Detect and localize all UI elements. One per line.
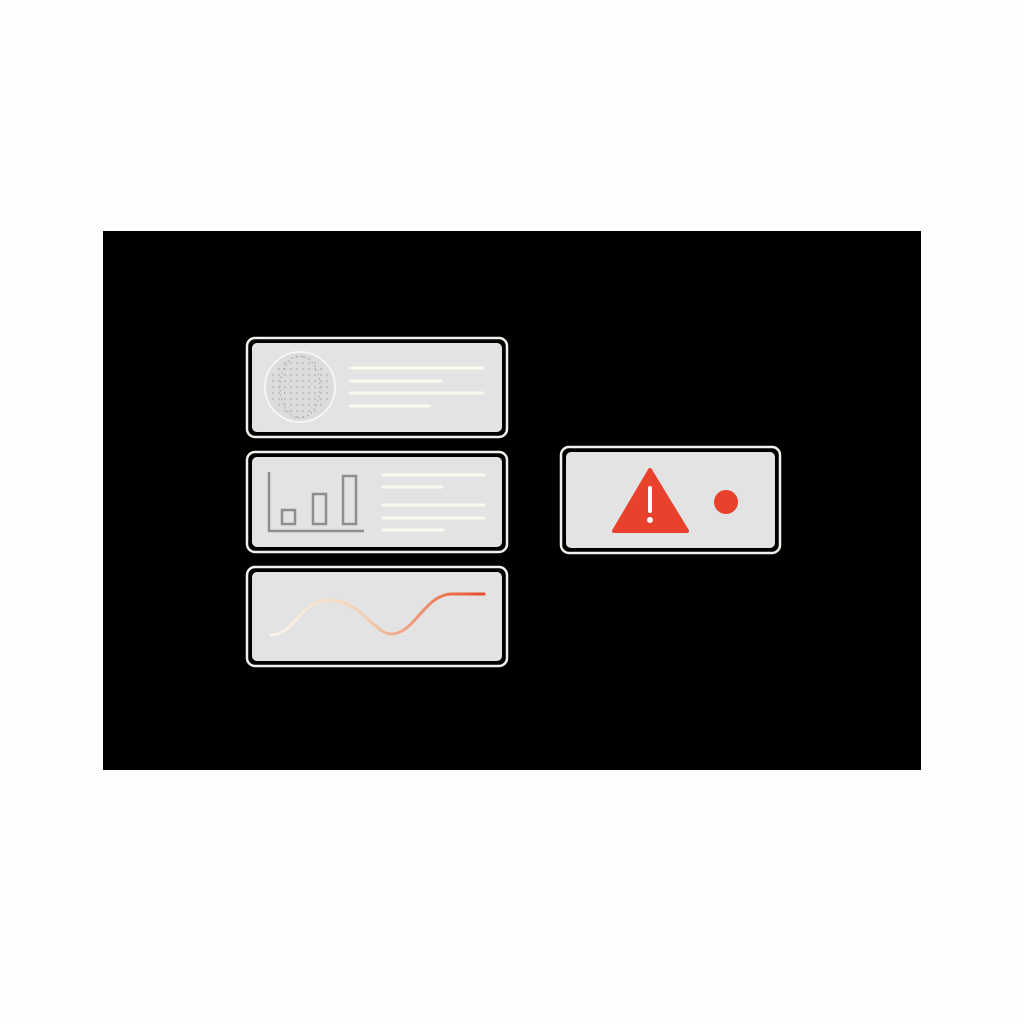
wave chart	[271, 594, 484, 635]
status dot	[714, 490, 738, 514]
icon: warning triangle	[614, 470, 687, 531]
dark screen panel	[103, 231, 921, 770]
card: alert	[561, 447, 780, 553]
card: globe summary	[247, 338, 507, 437]
bar chart icon	[269, 472, 364, 531]
card: bar chart	[247, 452, 507, 552]
icon: dotted globe	[265, 352, 335, 422]
card: trend line	[247, 567, 507, 666]
text lines	[383, 475, 484, 530]
text lines	[350, 368, 483, 406]
